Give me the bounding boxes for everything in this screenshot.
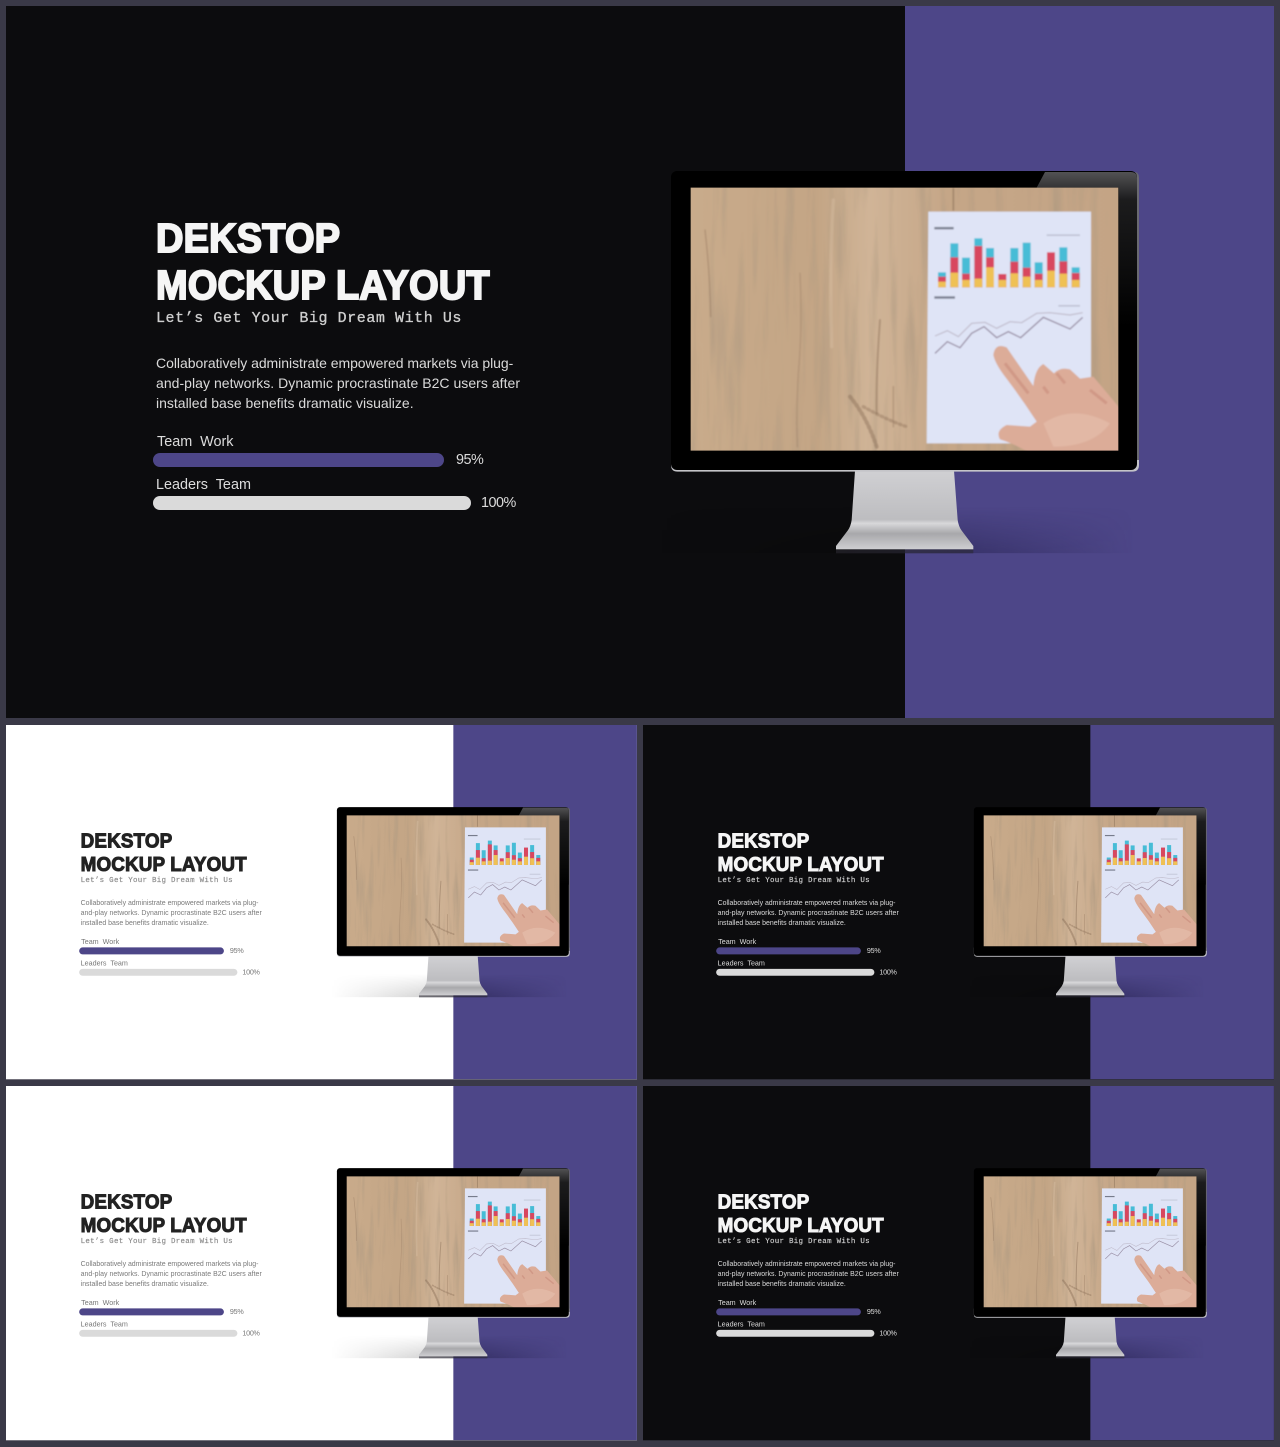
title: DEKSTOP [81, 829, 172, 852]
progress bar: leaders team [716, 1330, 874, 1337]
body text: installed base benefits dramatic visualize. [81, 1280, 209, 1288]
panel: main dark slide [6, 6, 1274, 718]
body text: Collaboratively administrate empowered markets via plug- [718, 899, 895, 907]
label: leaders team: Leaders Team [81, 959, 128, 967]
purple side panel [1090, 1086, 1274, 1440]
purple side panel [453, 725, 637, 1079]
body text [156, 355, 520, 411]
body text: installed base benefits dramatic visualize. [718, 1280, 846, 1288]
label: team work: Team Work [81, 938, 119, 946]
label: leaders team: Leaders Team [718, 959, 765, 967]
progress bar: team work [79, 1308, 224, 1315]
subtitle: Let’s Get Your Big Dream With Us [81, 1237, 233, 1246]
purple side panel [1090, 725, 1274, 1079]
label: team work: Team Work [718, 938, 756, 946]
value: 100%: 100% [242, 1329, 260, 1337]
title [156, 215, 490, 308]
label: team work: Team Work [718, 1299, 756, 1307]
label: team work: Team Work [81, 1299, 119, 1307]
purple side panel [453, 1086, 637, 1440]
body text: Collaboratively administrate empowered markets via plug- [156, 355, 513, 371]
desktop monitor mockup [336, 807, 570, 998]
subtitle: Let’s Get Your Big Dream With Us [81, 876, 233, 885]
value: 95%: 95% [230, 1308, 244, 1316]
panel: dark slide top right [643, 725, 1274, 1079]
label: team work: Team Work [157, 434, 234, 450]
value: 100%: 100% [242, 968, 260, 976]
progress bar: leaders team [79, 969, 237, 976]
panel: dark slide bottom right [643, 1086, 1274, 1440]
value: 95%: 95% [867, 1308, 881, 1316]
body text: Collaboratively administrate empowered markets via plug- [81, 1260, 258, 1268]
progress bar: team work [716, 1308, 861, 1315]
title: MOCKUP LAYOUT [718, 852, 884, 875]
title: DEKSTOP [156, 215, 340, 261]
label: leaders team: Leaders Team [718, 1320, 765, 1328]
body text: and-play networks. Dynamic procrastinate B2C users after [81, 1270, 262, 1278]
title: DEKSTOP [718, 829, 809, 852]
progress bar: leaders team [716, 969, 874, 976]
value: 95%: 95% [867, 947, 881, 955]
value: 100%: 100% [879, 1329, 897, 1337]
desktop monitor mockup [974, 1168, 1207, 1358]
progress bar: leaders team [153, 496, 471, 510]
progress bar: team work [79, 947, 224, 954]
label: leaders team: Leaders Team [81, 1320, 128, 1328]
title [81, 829, 247, 875]
title: MOCKUP LAYOUT [156, 262, 490, 308]
purple side panel [905, 6, 1274, 718]
body text: installed base benefits dramatic visualize. [81, 919, 209, 927]
body text: and-play networks. Dynamic procrastinate B2C users after [81, 909, 262, 917]
body text: and-play networks. Dynamic procrastinate B2C users after [718, 1270, 899, 1278]
value: 100%: 100% [879, 968, 897, 976]
title [718, 1190, 884, 1236]
progress bar: team work [716, 947, 861, 954]
value: 95%: 95% [456, 452, 483, 468]
subtitle: Let’s Get Your Big Dream With Us [718, 876, 870, 885]
panel: light slide bottom left [6, 1086, 637, 1440]
body text [718, 1260, 899, 1288]
body text [80, 1260, 262, 1288]
value: 100%: 100% [481, 495, 516, 511]
desktop monitor mockup [974, 807, 1207, 998]
body text [80, 899, 262, 927]
value: 95%: 95% [230, 947, 244, 955]
subtitle: Let’s Get Your Big Dream With Us [156, 310, 462, 327]
title [81, 1190, 247, 1236]
subtitle: Let’s Get Your Big Dream With Us [718, 1237, 870, 1246]
title: MOCKUP LAYOUT [718, 1213, 884, 1236]
body text: installed base benefits dramatic visualize. [156, 395, 414, 411]
body text: and-play networks. Dynamic procrastinate B2C users after [156, 375, 520, 391]
progress bar: leaders team [79, 1330, 237, 1337]
body text [718, 899, 899, 927]
desktop monitor mockup [336, 1168, 570, 1358]
title [718, 829, 884, 875]
title: MOCKUP LAYOUT [81, 1213, 247, 1236]
title: MOCKUP LAYOUT [81, 852, 247, 875]
body text: installed base benefits dramatic visualize. [718, 919, 846, 927]
title: DEKSTOP [81, 1190, 172, 1213]
panel: light slide top left [6, 725, 637, 1079]
body text: Collaboratively administrate empowered markets via plug- [81, 899, 258, 907]
desktop monitor mockup [671, 171, 1139, 554]
progress bar: team work [153, 453, 444, 467]
body text: and-play networks. Dynamic procrastinate B2C users after [718, 909, 899, 917]
body text: Collaboratively administrate empowered markets via plug- [718, 1260, 895, 1268]
title: DEKSTOP [718, 1190, 809, 1213]
label: leaders team: Leaders Team [156, 477, 251, 493]
